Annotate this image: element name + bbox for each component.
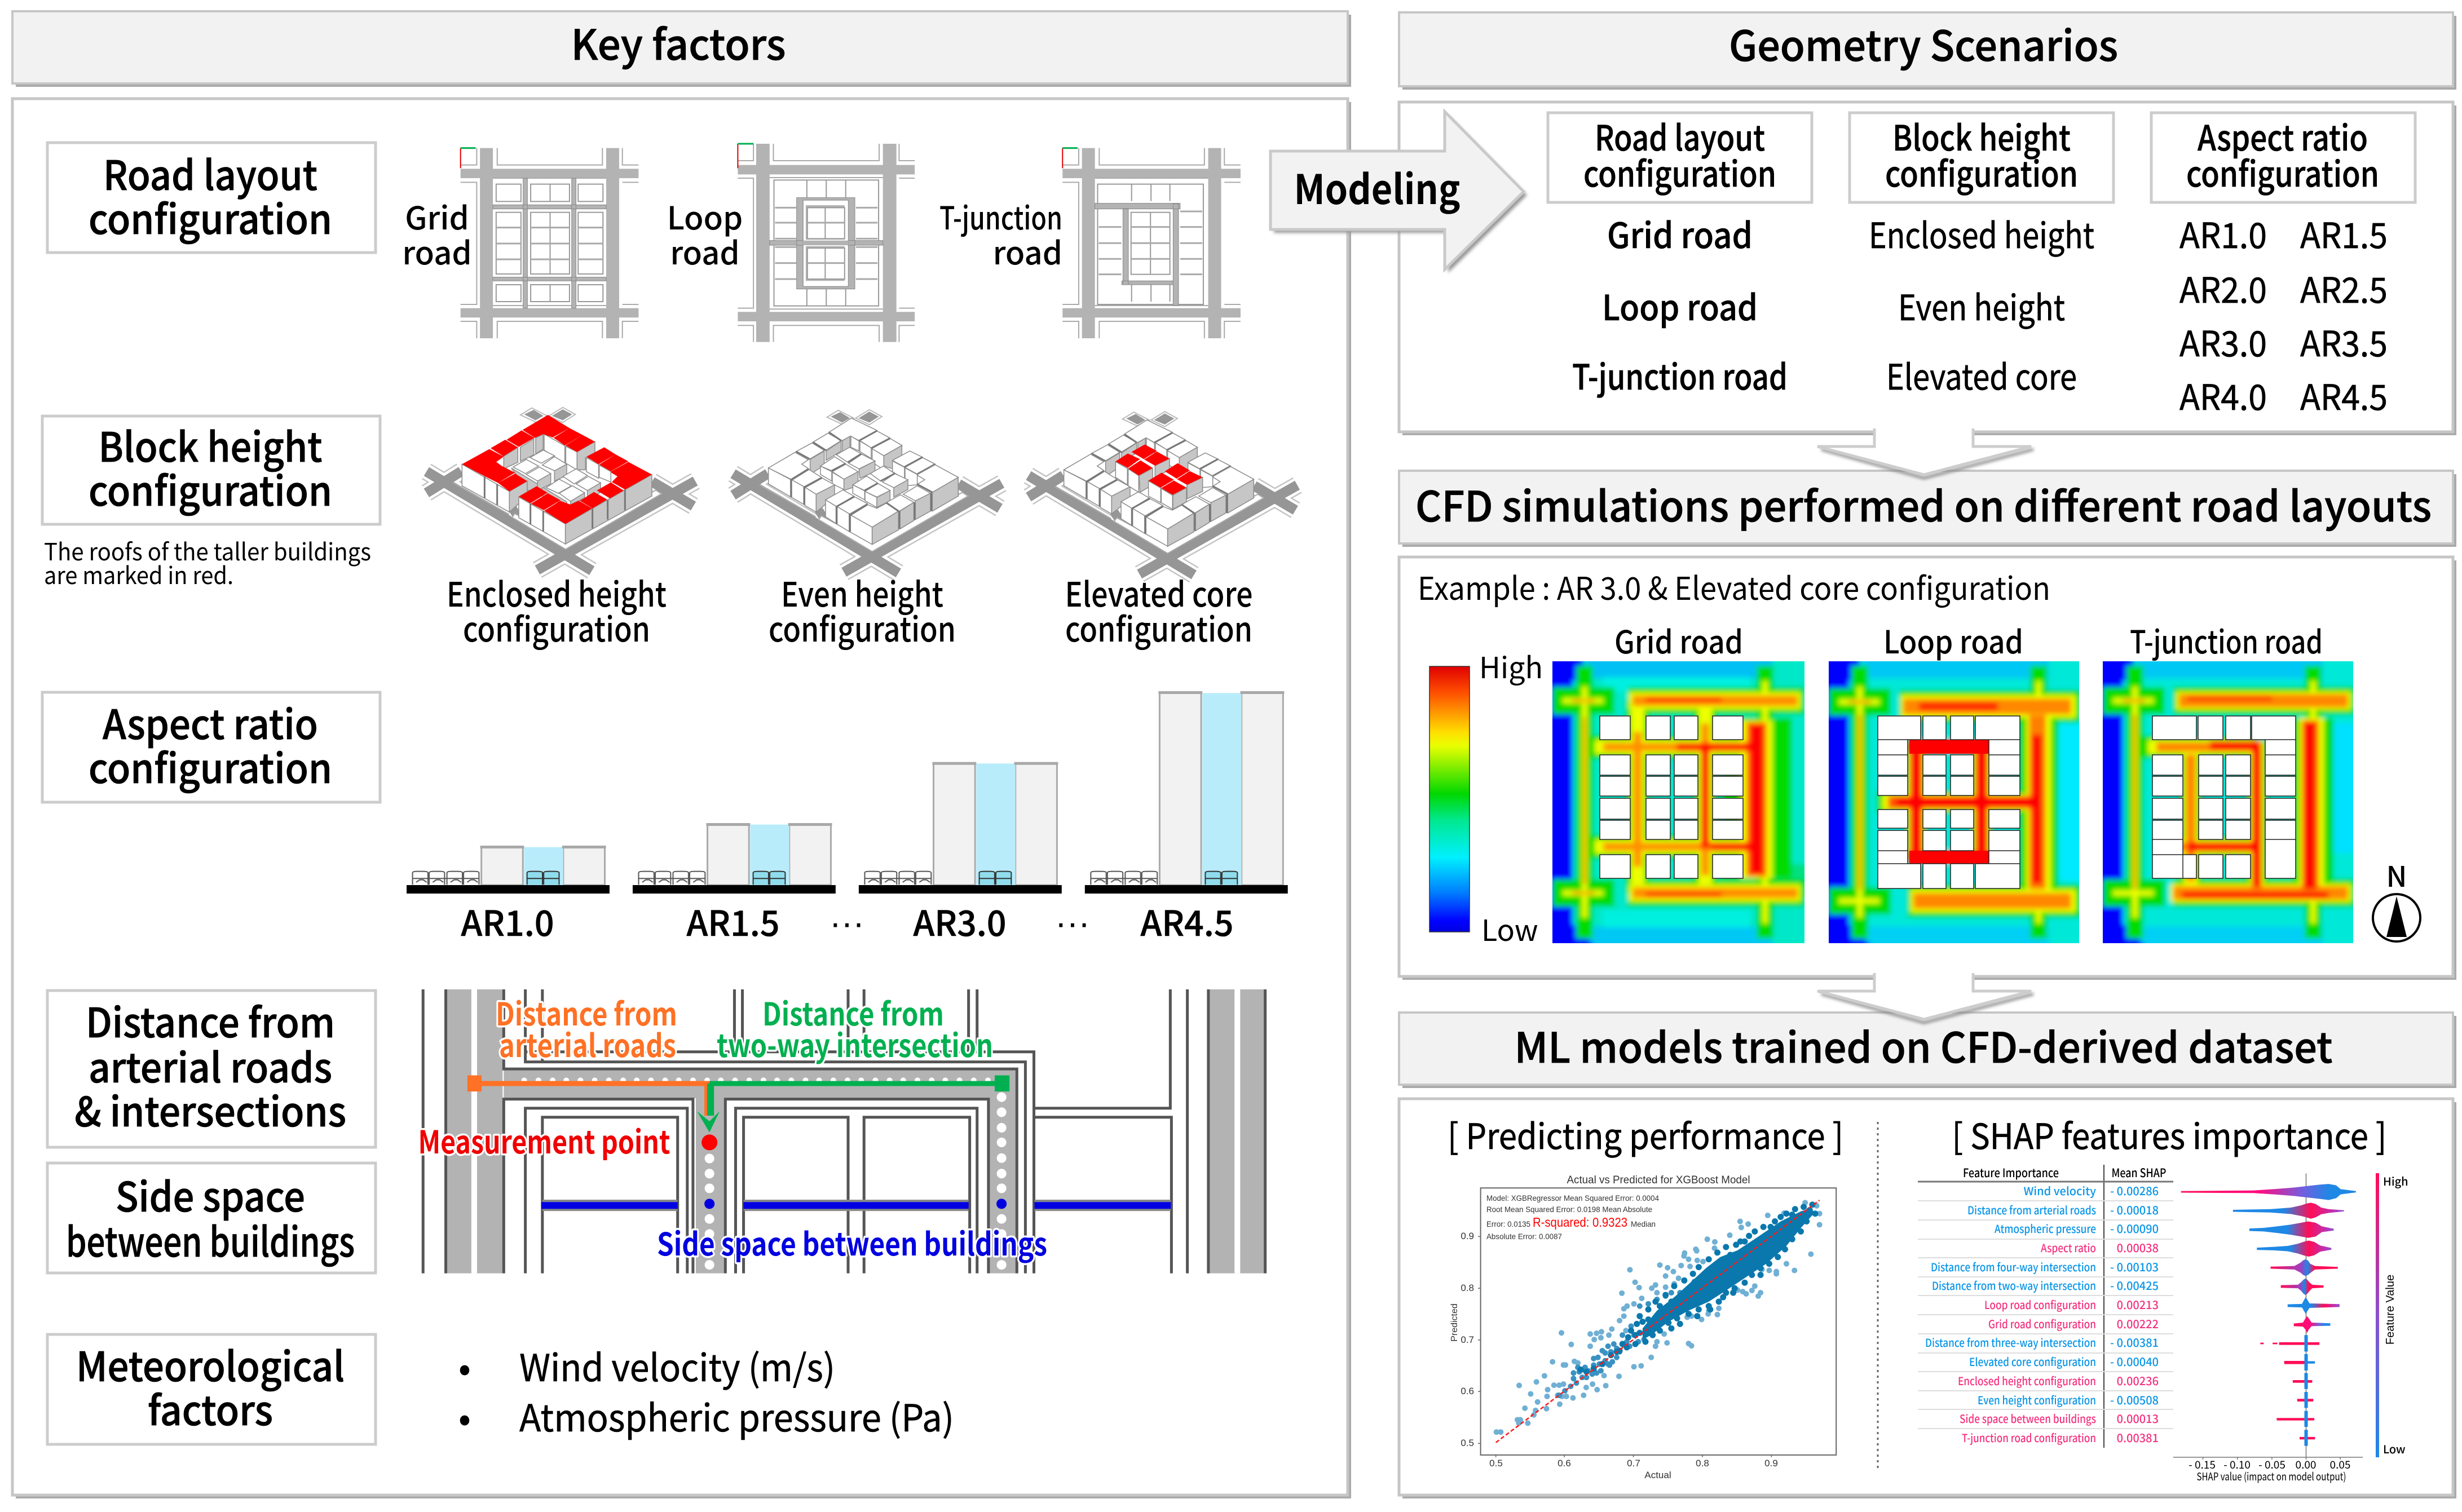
chart: actual vs predicted scatter: Median [1631,1219,1656,1228]
column: block height configuration: Even height [1898,280,2065,330]
diagram: loop road: Loop [667,193,743,239]
label: aspect ratio configuration: configuration [89,736,332,795]
chart: actual vs predicted scatter: 0.6 [1461,1386,1474,1396]
heading: key factors [12,11,1351,87]
column: road layout configuration: Road layout [1595,110,1765,161]
legend: color scale [1429,644,1543,949]
heatmap: grid road: Grid road [1614,617,1743,663]
list: meteorological factors [458,1338,954,1443]
diagram: elevated core [1029,412,1298,652]
table: feature importance: Enclosed height configuration [1958,1372,2096,1389]
heading: key factors: Key factors [571,12,786,72]
chart: actual vs predicted scatter: 0.7 [1461,1334,1474,1345]
chart: actual vs predicted scatter: Actual [1644,1470,1671,1480]
column: road layout configuration: Grid road [1607,207,1753,258]
table: feature importance: - 0.00103 [2110,1258,2159,1275]
column: aspect ratio configuration: AR3.5 [2300,316,2388,366]
label: block height configuration [42,414,380,524]
column: aspect ratio configuration: AR1.5 [2300,207,2388,258]
table: feature importance: Side space between buildings [1960,1410,2096,1426]
table: feature importance: Grid road configuration [1988,1315,2096,1332]
chart: SHAP beeswarm: - 0.05 [2258,1457,2285,1472]
chart: actual vs predicted scatter: 0.8 [1461,1283,1474,1293]
chart: actual vs predicted scatter: 0.8 [1696,1458,1709,1469]
table: feature importance: T-junction road configuration [1962,1429,2096,1445]
table: feature importance: 0.00213 [2117,1296,2159,1312]
column: road layout configuration: T-junction road [1572,349,1788,400]
label: distance from arterial roads and intersections: & intersections [74,1079,346,1138]
label: side space between buildings [47,1163,376,1273]
column: road layout configuration: configuration [1583,146,1776,197]
diagram: even height: Even height [781,568,943,617]
chart: actual vs predicted scatter: 0.6 [1557,1458,1571,1469]
chart: SHAP beeswarm [2173,1174,2363,1484]
section: AR4.5 [1085,691,1288,946]
label: distance from arterial roads and intersections: Distance from [86,990,335,1049]
icon: north arrow [2373,855,2420,941]
table: feature importance: 0.00236 [2117,1372,2159,1389]
label: distance from two-way intersection [717,989,993,1067]
arrow: geometry to CFD [1817,427,2033,478]
table: feature importance: - 0.00018 [2110,1201,2159,1218]
column: aspect ratio configuration: AR1.0 [2179,207,2267,258]
chart: SHAP beeswarm: SHAP value (impact on model output) [2197,1469,2346,1484]
label: distance from arterial roads and intersections: arterial roads [89,1035,332,1094]
chart: actual vs predicted scatter: 0.5 [1461,1438,1474,1448]
table: feature importance: - 0.00381 [2110,1334,2159,1350]
legend: color scale: High [1479,644,1543,687]
panel: key factors [12,11,1351,1498]
label: side space between buildings: between buildings [66,1209,355,1268]
heatmap: grid road [1552,628,1804,943]
note: red roofs: The roofs of the taller buildings [44,533,371,568]
label: distance from arterial roads and intersections [47,990,376,1147]
column: aspect ratio configuration: AR4.5 [2300,369,2388,420]
road layout diagrams [402,144,1241,342]
table: feature importance: Elevated core configuration [1969,1353,2096,1369]
diagram: T-junction road: road [993,228,1062,274]
label: aspect ratio configuration: Aspect ratio [103,692,318,751]
diagram: T-junction road [939,148,1241,338]
diagram: grid road: Grid [405,193,469,239]
legend: feature value [2376,1173,2408,1457]
table: feature importance: 0.00381 [2117,1429,2159,1445]
table: feature importance: Mean SHAP [2111,1164,2167,1181]
label: measurement point: Measurement point [418,1117,670,1163]
heading: ML models: ML models trained on CFD-derived dataset [1515,1015,2332,1075]
label: meteorological factors: Meteorological [76,1334,345,1393]
diagram: loop road [667,144,915,342]
label: distance from arterial roads: arterial roads [499,1021,676,1067]
column: aspect ratio configuration: AR2.0 [2179,262,2267,313]
heatmap: T-junction road: T-junction road [2130,617,2323,663]
diagram: loop road: road [670,228,740,274]
chart: SHAP beeswarm: - 0.15 [2189,1457,2216,1472]
chart: SHAP beeswarm: 0.05 [2330,1457,2350,1472]
table: feature importance: Distance from three-way intersection [1925,1334,2096,1350]
aspect ratio street sections [407,691,1288,946]
street plan with measurement points [418,989,1265,1274]
label: aspect ratio configuration [42,692,380,802]
column: aspect ratio configuration: configuration [2186,146,2379,197]
column: aspect ratio configuration: Aspect ratio [2198,110,2368,161]
chart: actual vs predicted scatter: Actual vs Predicted for XGBoost Model [1567,1174,1750,1186]
chart: actual vs predicted scatter: 0.5 [1489,1458,1503,1469]
column: block height configuration [1850,110,2114,400]
label: distance from two-way intersection: two-way intersection [717,1021,993,1067]
section: AR4.5: AR4.5 [1140,895,1234,946]
heatmap: loop road: Loop road [1883,617,2023,663]
heading: CFD simulations: CFD simulations performed on different road layouts [1415,474,2432,534]
label: road layout configuration: configuration [89,187,332,246]
ellipsis: ··· [830,904,864,943]
chart: actual vs predicted scatter: Error: 0.0135 [1486,1219,1530,1228]
list: meteorological factors: • [458,1389,471,1443]
table: feature importance: 0.00013 [2117,1410,2159,1426]
column: aspect ratio configuration: AR3.0 [2179,316,2267,366]
chart: SHAP beeswarm: - 0.10 [2223,1457,2251,1472]
list: meteorological factors: Wind velocity (m/s) [519,1338,835,1392]
table: feature importance: Atmospheric pressure [1995,1220,2096,1236]
diagram: T-junction road: T-junction [939,193,1062,239]
diagram: enclosed height [426,408,695,652]
chart: actual vs predicted scatter: Model: XGBRegressor Mean Squared Error: 0.0004 [1486,1193,1659,1202]
column: block height configuration: Enclosed height [1869,207,2094,258]
table: feature importance: Loop road configuration [1984,1296,2096,1312]
chart: actual vs predicted scatter: Absolute Error: 0.0087 [1486,1232,1562,1241]
icon: north arrow: N [2386,855,2407,895]
arrow: modeling [1270,112,1527,273]
diagram: enclosed height: configuration [463,603,650,652]
section: AR3.0 [859,762,1062,946]
table: feature importance: - 0.00425 [2110,1277,2159,1293]
column: block height configuration: Block height [1892,110,2071,161]
table: feature importance: - 0.00090 [2110,1220,2159,1236]
chart: actual vs predicted scatter: 0.7 [1627,1458,1640,1469]
legend: feature value: High [2383,1173,2408,1189]
column: aspect ratio configuration [2151,110,2415,420]
ellipsis: ··· [1055,904,1090,943]
list: meteorological factors: Atmospheric pressure (Pa) [519,1389,954,1443]
section: AR1.5: AR1.5 [687,895,779,946]
heading: SHAP features importance: [ SHAP features importance ] [1952,1108,2386,1159]
column: block height configuration: Elevated core [1886,349,2077,400]
table: feature importance: 0.00038 [2117,1239,2159,1255]
label: meteorological factors: factors [148,1378,273,1437]
table: feature importance: Aspect ratio [2041,1239,2096,1255]
table: feature importance: Distance from arterial roads [1967,1201,2096,1218]
label: distance from two-way intersection: Distance from [762,989,944,1035]
diagram: grid road: road [402,228,472,274]
chart: actual vs predicted scatter: 0.9 [1764,1458,1778,1469]
table: feature importance: Distance from two-way intersection [1932,1277,2096,1293]
column: aspect ratio configuration: AR2.5 [2300,262,2388,313]
table: feature importance [1918,1164,2173,1448]
section: AR3.0: AR3.0 [914,895,1006,946]
chart: SHAP beeswarm: 0.00 [2296,1457,2316,1472]
label: block height configuration: Block height [98,414,323,474]
list: meteorological factors: • [458,1338,471,1392]
column: road layout configuration: Loop road [1602,280,1758,330]
chart: actual vs predicted scatter [1450,1174,1836,1480]
label: distance from arterial roads: Distance from [496,989,677,1035]
section: AR1.0 [407,846,610,946]
table: feature importance: 0.00222 [2117,1315,2159,1332]
legend: color scale: Low [1481,907,1538,949]
panel: CFD example [1399,557,2456,980]
column: aspect ratio configuration: AR4.0 [2179,369,2267,420]
legend: feature value: Low [2383,1440,2406,1457]
label: meteorological factors [47,1334,376,1444]
table: feature importance: Wind velocity [2024,1182,2096,1199]
table: feature importance: - 0.00286 [2110,1182,2159,1199]
heading: geometry scenarios: Geometry Scenarios [1729,13,2118,73]
chart: actual vs predicted scatter: 0.9 [1461,1231,1474,1241]
label: distance from arterial roads [496,989,677,1067]
diagram: elevated core: Elevated core [1065,568,1253,617]
diagram: even height: configuration [769,603,956,652]
heading: ML models [1399,1013,2456,1088]
diagram: grid road [402,148,638,338]
chart: actual vs predicted scatter: Root Mean Squared Error: 0.0198 Mean Absolute [1486,1205,1652,1214]
note: red roofs [44,533,371,591]
legend: feature value: Feature Value [2384,1275,2397,1345]
chart: actual vs predicted scatter: Predicted [1450,1303,1459,1342]
heading: predicting performance: [ Predicting performance ] [1448,1108,1843,1159]
column: road layout configuration [1548,110,1812,400]
label: block height configuration: configuration [89,458,332,518]
column: block height configuration: configuration [1885,146,2078,197]
heatmap: T-junction road [2103,628,2353,943]
label: road layout configuration: Road layout [103,143,317,202]
diagram: elevated core: configuration [1065,603,1252,652]
block height diagrams [426,408,1298,652]
table: feature importance: - 0.00508 [2110,1391,2159,1408]
heading: geometry scenarios [1399,12,2456,90]
table: feature importance: - 0.00040 [2110,1353,2159,1369]
diagram: even height [733,410,1002,652]
note: red roofs: are marked in red. [44,557,233,591]
arrow: modeling: Modeling [1294,157,1461,216]
table: feature importance: Feature Importance [1963,1164,2059,1181]
section: AR1.0: AR1.0 [461,895,554,946]
label: road layout configuration [47,143,376,253]
diagram: enclosed height: Enclosed height [447,568,667,617]
heatmap: loop road [1829,628,2079,943]
table: feature importance: Distance from four-way intersection [1931,1258,2096,1275]
panel: ML results [1399,1099,2456,1498]
arrow: CFD to ML [1817,972,2033,1023]
table: feature importance: Even height configuration [1978,1391,2096,1408]
section: AR1.5 [633,823,836,946]
chart: actual vs predicted scatter: R-squared: 0.9323 [1533,1215,1627,1230]
text: example caption: Example : AR 3.0 & Elevated core configuration [1418,564,2050,609]
label: side space between buildings: Side space between buildings [657,1219,1047,1265]
label: side space between buildings: Side space [116,1164,305,1223]
panel: geometry scenarios [1399,102,2456,435]
